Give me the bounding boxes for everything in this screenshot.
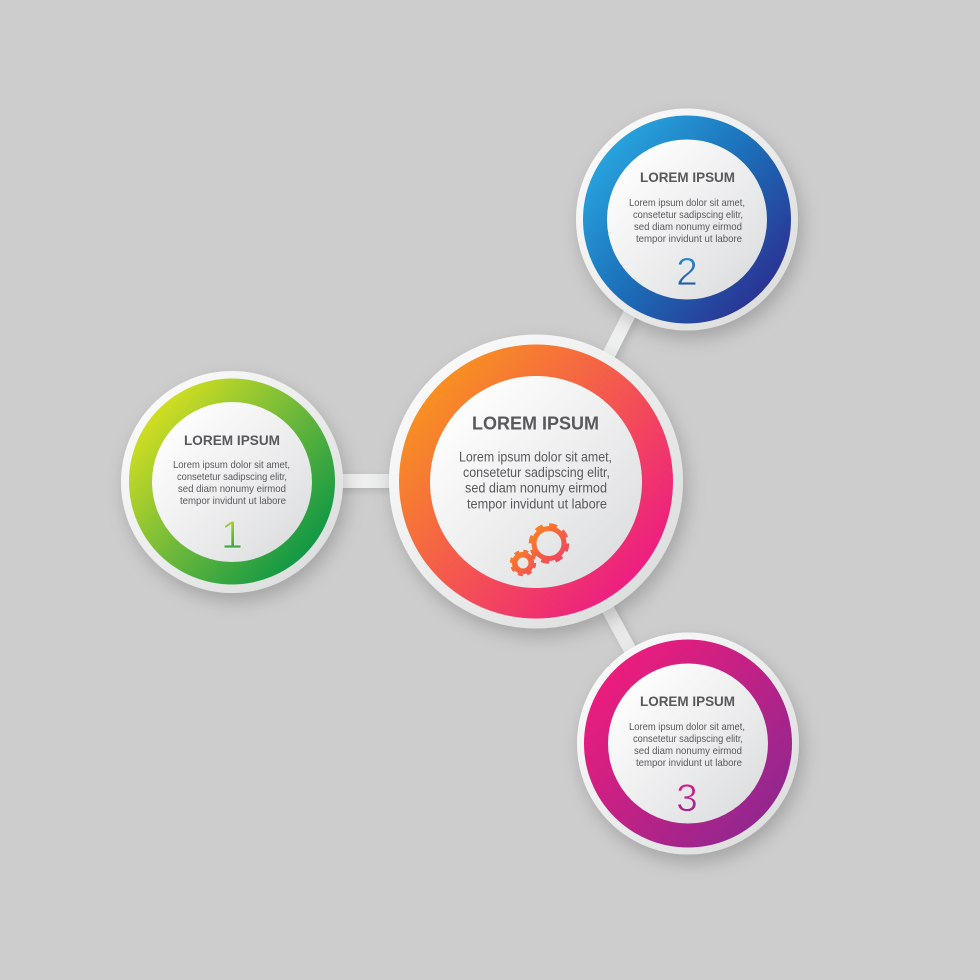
outer rim bbox=[121, 371, 343, 593]
inner disc bbox=[430, 376, 642, 588]
body text bbox=[459, 450, 612, 512]
body text: Lorem ipsum dolor sit amet, bbox=[629, 721, 745, 733]
connector: circle 1 to centre bbox=[335, 474, 395, 488]
body text: Lorem ipsum dolor sit amet, bbox=[459, 450, 612, 464]
body text: sed diam nonumy eirmod bbox=[465, 480, 607, 496]
body text bbox=[629, 721, 745, 769]
body text: consetetur sadipscing elitr, bbox=[633, 209, 743, 221]
outer rim bbox=[389, 334, 683, 628]
body text: consetetur sadipscing elitr, bbox=[463, 465, 610, 480]
number 3: 3 bbox=[676, 777, 698, 820]
body text: consetetur sadipscing elitr, bbox=[177, 471, 287, 483]
number 1: 1 bbox=[221, 514, 243, 557]
inner disc bbox=[607, 140, 767, 300]
connector: centre to circle 3 bbox=[605, 604, 634, 657]
green gradient ring bbox=[129, 378, 335, 584]
heading: LOREM IPSUM bbox=[640, 169, 735, 185]
blue gradient ring bbox=[583, 116, 791, 324]
panel: circle 3 bbox=[577, 632, 799, 854]
heading: LOREM IPSUM bbox=[184, 432, 280, 448]
inner disc bbox=[152, 402, 312, 562]
icon: gears bbox=[511, 525, 568, 575]
heading: LOREM IPSUM bbox=[640, 693, 735, 709]
panel: centre circle bbox=[389, 334, 683, 628]
inner disc bbox=[608, 664, 768, 824]
body text: Lorem ipsum dolor sit amet, bbox=[173, 459, 290, 471]
body text: sed diam nonumy eirmod bbox=[178, 483, 286, 495]
body text: consetetur sadipscing elitr, bbox=[633, 733, 743, 745]
connector: centre to circle 2 bbox=[604, 305, 634, 364]
panel: circle 2 bbox=[576, 108, 798, 330]
magenta gradient ring bbox=[584, 640, 792, 848]
number 2: 2 bbox=[676, 251, 698, 294]
body text: sed diam nonumy eirmod bbox=[634, 745, 742, 757]
body text bbox=[629, 197, 745, 245]
orange-pink gradient ring bbox=[399, 344, 673, 618]
body text: tempor invidunt ut labore bbox=[636, 757, 742, 769]
body text: tempor invidunt ut labore bbox=[467, 496, 607, 512]
body text bbox=[173, 459, 290, 507]
panel: circle 1 bbox=[121, 371, 343, 593]
outer rim bbox=[576, 108, 798, 330]
body text: Lorem ipsum dolor sit amet, bbox=[629, 197, 745, 209]
outer rim bbox=[577, 632, 799, 854]
heading: LOREM IPSUM bbox=[472, 412, 599, 434]
body text: tempor invidunt ut labore bbox=[180, 495, 286, 507]
body text: tempor invidunt ut labore bbox=[636, 233, 742, 245]
body text: sed diam nonumy eirmod bbox=[634, 221, 742, 233]
